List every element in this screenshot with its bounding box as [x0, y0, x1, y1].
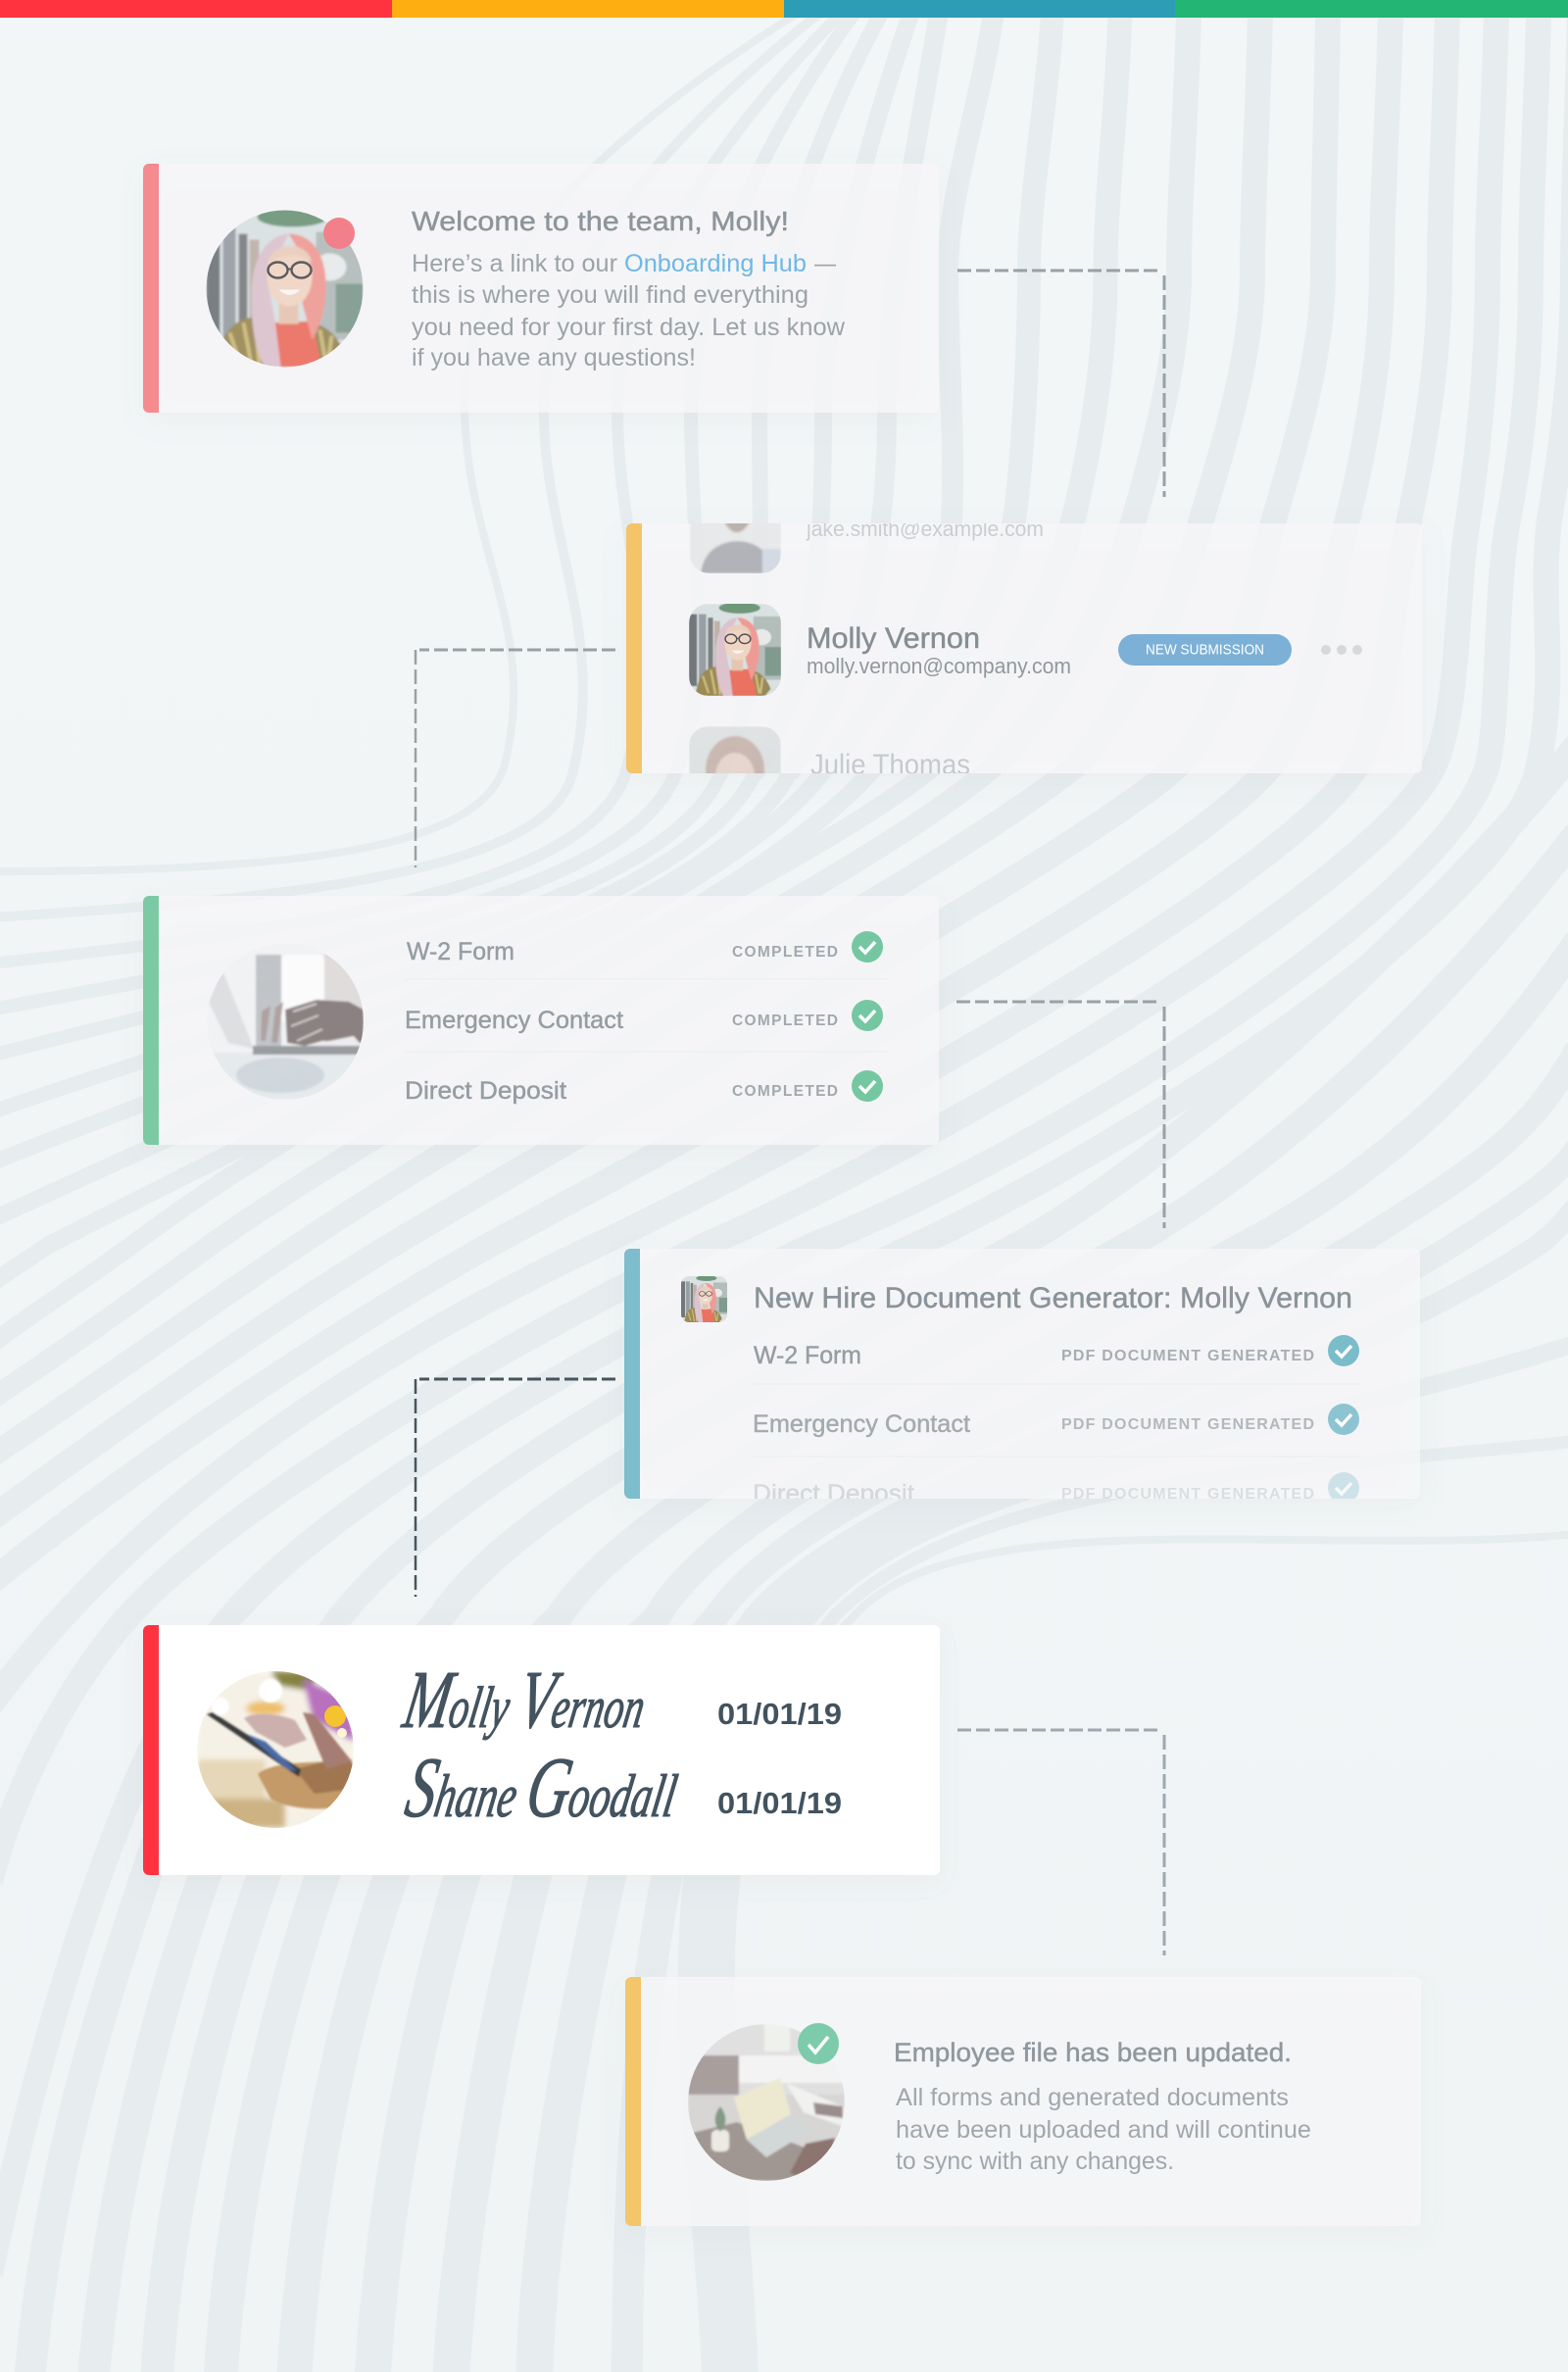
body text: Onboarding Hub [624, 250, 807, 277]
panel: welcome message [143, 164, 939, 413]
body text: this is where you will find everything [412, 281, 808, 309]
body text: have been uploaded and will continue [896, 2116, 1311, 2144]
panel: document generator [624, 1249, 1420, 1507]
accent bar [143, 1625, 159, 1875]
panel: employee file updated [625, 1977, 1310, 2226]
connector: welcome card to list card [957, 271, 1164, 497]
row: direct deposit PDF (fading): Direct Deposit [753, 1480, 914, 1507]
row: W-2 PDF: PDF DOCUMENT GENERATED [1061, 1348, 1314, 1364]
row: emergency contact [405, 1000, 883, 1034]
photo: laptop typing [207, 943, 364, 1100]
row: direct deposit: Direct Deposit [405, 1077, 566, 1105]
date: Molly: 01/01/19 [717, 1697, 842, 1731]
row dividers [405, 979, 888, 1052]
body text: you need for your first day. Let us know [412, 314, 846, 341]
text: Jake email: jake.smith@example.com [806, 517, 1044, 541]
body text: All forms and generated documents [896, 2084, 1289, 2111]
row: direct deposit: COMPLETED [732, 1083, 838, 1100]
connector: signature card to file card [957, 1730, 1164, 1955]
photo: Molly small [681, 1275, 727, 1322]
row: direct deposit [405, 1070, 883, 1105]
row: direct deposit PDF (fading): PDF DOCUMENT GENERATED [1061, 1486, 1314, 1503]
heading: Welcome to the team, Molly! [412, 206, 789, 236]
row: emergency contact PDF [753, 1404, 1359, 1438]
photo: laptop on desk [688, 2024, 845, 2181]
panel: new submission list [626, 523, 1422, 773]
more menu dots [1321, 645, 1362, 655]
badge: new submission [1118, 634, 1292, 666]
connector: list card to forms card [416, 650, 615, 867]
panel title: New Hire Document Generator: Molly Vernon [754, 1282, 1352, 1314]
accent bar [624, 1249, 640, 1499]
row: direct deposit PDF (fading) [755, 1472, 1359, 1499]
signature: Shane Goodall: Shane Goodall [400, 1741, 686, 1836]
photo: Jake [690, 523, 781, 573]
connector: forms card to generator card [956, 1002, 1164, 1228]
body text [896, 2084, 1311, 2175]
accent bar [625, 1977, 641, 2226]
top colour bar [0, 0, 1568, 18]
photo: Molly thumbnail [689, 602, 781, 696]
row: W-2 PDF: W-2 Form [754, 1342, 861, 1369]
row dividers [754, 1384, 1359, 1457]
row: W-2 form [407, 931, 883, 965]
text: Molly name: Molly Vernon [807, 622, 980, 655]
accent bar [143, 896, 159, 1145]
accent bar [626, 523, 642, 773]
row: W-2 PDF [754, 1335, 1359, 1369]
panel: completed forms [143, 896, 939, 1145]
text: Molly email: molly.vernon@company.com [807, 654, 1071, 678]
connector: generator card to signature card [416, 1379, 615, 1597]
row: W-2 form: W-2 Form [407, 938, 514, 965]
body text: to sync with any changes. [896, 2148, 1174, 2175]
body text: if you have any questions! [412, 344, 696, 371]
body text [412, 250, 846, 371]
notification dot [323, 218, 355, 249]
row: W-2 form: COMPLETED [732, 944, 838, 961]
body text: — [814, 250, 836, 277]
row: emergency contact PDF: Emergency Contact [753, 1410, 970, 1438]
badge: new submission: NEW SUBMISSION [1146, 641, 1264, 659]
text: Julie name: Julie Thomas [810, 749, 970, 781]
panel: signatures [143, 1625, 940, 1875]
row: emergency contact: Emergency Contact [405, 1007, 623, 1034]
date: Shane: 01/01/19 [717, 1786, 842, 1820]
check badge [798, 2023, 839, 2064]
accent bar [143, 164, 159, 413]
heading: Employee file has been updated. [894, 2038, 1292, 2067]
signature: Molly Vernon: Molly Vernon [397, 1655, 654, 1746]
photo: Julie [689, 726, 781, 773]
row: emergency contact PDF: PDF DOCUMENT GENERATED [1061, 1416, 1314, 1433]
row: emergency contact: COMPLETED [732, 1013, 838, 1029]
photo: Molly [206, 208, 363, 367]
photo: hand on phone [197, 1671, 354, 1828]
body text: Here’s a link to our [412, 250, 617, 277]
